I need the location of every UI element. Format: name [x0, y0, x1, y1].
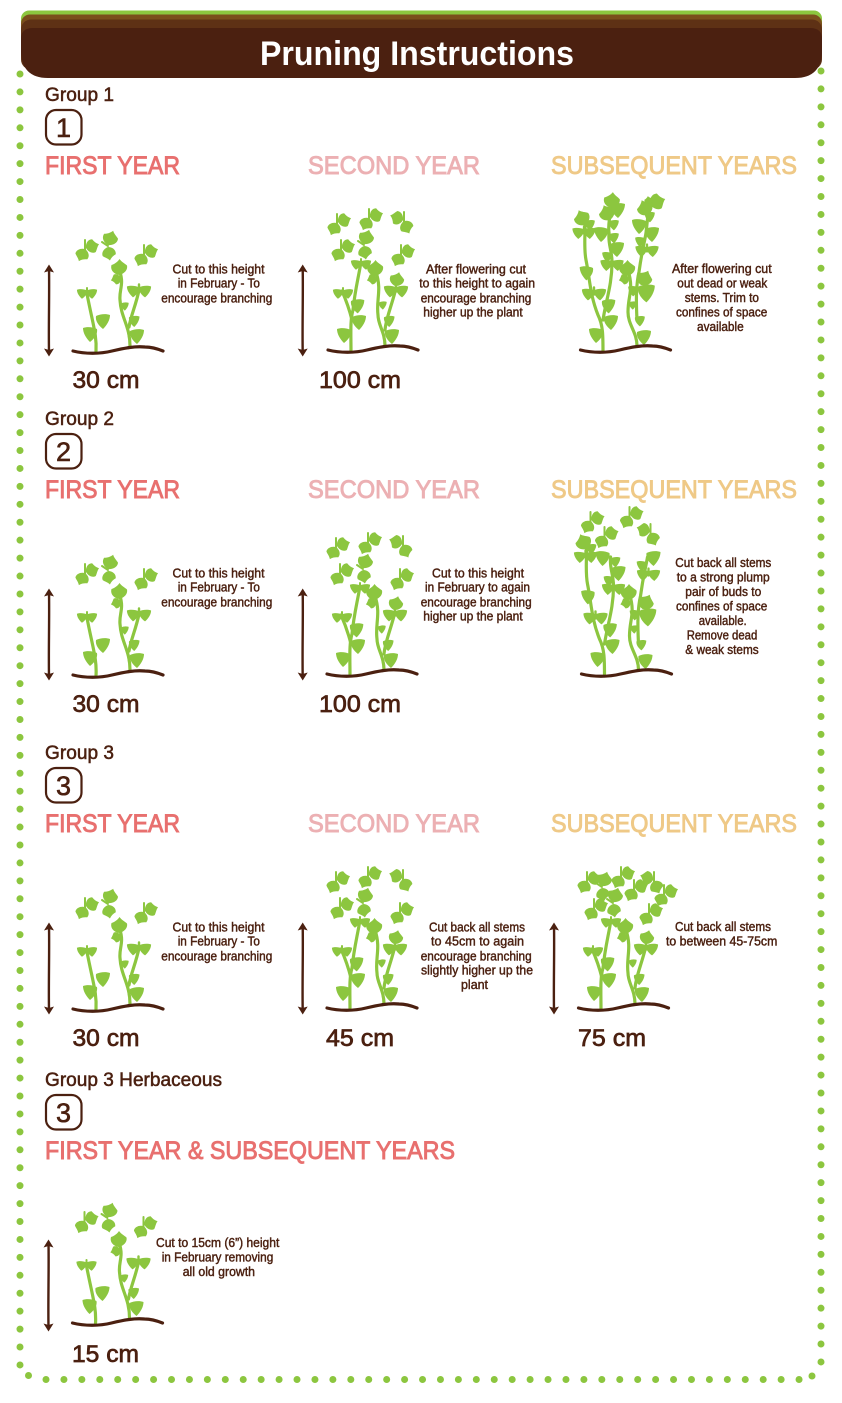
plant illustration — [575, 864, 680, 1010]
plant illustration — [73, 552, 163, 677]
instruction text: Cut to this height — [172, 566, 265, 580]
instruction text: stems. Trim to — [685, 291, 759, 305]
instruction text — [421, 566, 532, 624]
group 3 herbaceous label: Group 3 Herbaceous — [45, 1070, 222, 1091]
group 2 label: Group 2 — [45, 409, 114, 430]
instruction text: After flowering cut — [672, 262, 772, 276]
group 1 label: Group 1 — [45, 85, 114, 106]
instruction text: Cut to 15cm (6”) height — [156, 1236, 280, 1250]
heading: subsequent years: SUBSEQUENT YEARS — [551, 152, 797, 180]
heading: first year: FIRST YEAR — [45, 476, 180, 504]
instruction text: Remove dead — [687, 628, 757, 642]
header banner — [21, 10, 822, 78]
height arrow — [549, 922, 559, 1014]
height arrow — [44, 1240, 54, 1332]
instruction text — [666, 920, 777, 948]
instruction text: encourage branching — [161, 595, 272, 609]
instruction text — [161, 920, 272, 963]
instruction text: confines of space — [676, 306, 767, 320]
plant illustration — [571, 191, 670, 352]
heading: second year: SECOND YEAR — [308, 152, 480, 180]
instruction text: to a strong plump — [677, 570, 770, 584]
panel: group 1 — [44, 85, 797, 394]
instruction text: available — [697, 320, 744, 334]
heading: first year: FIRST YEAR — [45, 152, 180, 180]
instruction text: encourage branching — [421, 291, 531, 305]
panel: group 3 herbaceous — [44, 1070, 455, 1368]
height arrow — [298, 588, 308, 680]
instruction text — [421, 920, 533, 992]
heading: second year: SECOND YEAR — [308, 810, 480, 838]
instruction text: out dead or weak — [677, 276, 768, 290]
instruction text — [161, 262, 272, 305]
group 2 number badge: 2 — [56, 437, 71, 467]
instruction text: to this height to again — [419, 277, 535, 291]
group 1 number badge: 1 — [56, 113, 71, 143]
heading: subsequent years: SUBSEQUENT YEARS — [551, 476, 797, 504]
instruction text: confines of space — [676, 600, 767, 614]
height arrow — [44, 922, 54, 1014]
instruction text: Cut back all stems — [675, 556, 771, 570]
height label: 30 cm — [72, 691, 140, 718]
instruction text: & weak stems — [685, 643, 759, 657]
heading: subsequent years: SUBSEQUENT YEARS — [551, 810, 797, 838]
height arrow — [298, 922, 308, 1014]
instruction text: to 45cm to again — [431, 935, 524, 949]
instruction text: encourage branching — [421, 595, 532, 609]
heading: first year: FIRST YEAR — [45, 810, 180, 838]
group 3 label: Group 3 — [45, 743, 114, 764]
heading: second year: SECOND YEAR — [308, 476, 480, 504]
instruction text: pair of buds to — [685, 585, 761, 599]
instruction text: Cut to this height — [432, 566, 525, 580]
instruction text: After flowering cut — [426, 262, 527, 276]
instruction text: to between 45-75cm — [666, 934, 777, 948]
group 2 number badge — [46, 434, 82, 468]
instruction text: Cut back all stems — [675, 920, 771, 934]
instruction text — [161, 566, 272, 609]
instruction text: in February - To — [178, 277, 260, 291]
height label: 45 cm — [326, 1025, 394, 1052]
title: Pruning Instructions — [260, 35, 574, 73]
height label: 30 cm — [72, 1025, 140, 1052]
height label: 30 cm — [72, 367, 140, 394]
group 3 number badge — [46, 768, 82, 802]
instruction text — [419, 262, 535, 320]
instruction text — [675, 556, 771, 657]
instruction text: in February - To — [178, 935, 260, 949]
plant illustration — [324, 530, 417, 676]
plant illustration — [325, 206, 418, 352]
instruction text — [672, 262, 772, 334]
panel: group 3 — [44, 743, 797, 1052]
instruction text: slightly higher up the — [421, 964, 533, 978]
height arrow — [298, 264, 308, 356]
panel: group 2 — [44, 409, 797, 718]
instruction text: higher up the plant — [423, 610, 523, 624]
plant illustration — [73, 228, 163, 353]
instruction text: encourage branching — [421, 949, 532, 963]
instruction text: all old growth — [183, 1265, 255, 1279]
plant illustration — [324, 864, 417, 1010]
height arrow — [44, 588, 54, 680]
height label: 100 cm — [319, 367, 401, 394]
instruction text: Cut to this height — [172, 920, 265, 934]
instruction text: higher up the plant — [423, 306, 523, 320]
plant illustration — [573, 504, 672, 676]
instruction text: available. — [699, 614, 747, 628]
instruction text: in February to again — [425, 581, 530, 595]
instruction text: in February removing — [162, 1250, 273, 1264]
group 3 herbaceous number badge — [46, 1095, 82, 1130]
instruction text: plant — [461, 978, 489, 992]
instruction text: Cut back all stems — [429, 920, 525, 934]
instruction text: encourage branching — [161, 291, 272, 305]
plant illustration — [73, 886, 163, 1011]
group 3 herbaceous number badge: 3 — [56, 1098, 71, 1128]
heading: first year and subsequent years: FIRST YEAR & SUBSEQUENT YEARS — [45, 1137, 455, 1165]
instruction text: in February - To — [178, 581, 260, 595]
instruction text: Cut to this height — [172, 262, 265, 276]
group 1 number badge — [46, 110, 82, 144]
instruction text: encourage branching — [161, 949, 272, 963]
group 3 number badge: 3 — [56, 771, 71, 801]
height label: 100 cm — [319, 691, 401, 718]
height label: 75 cm — [578, 1025, 646, 1052]
plant illustration — [72, 1200, 162, 1325]
instruction text — [156, 1236, 280, 1279]
height label: 15 cm — [72, 1341, 139, 1368]
height arrow — [44, 264, 54, 356]
